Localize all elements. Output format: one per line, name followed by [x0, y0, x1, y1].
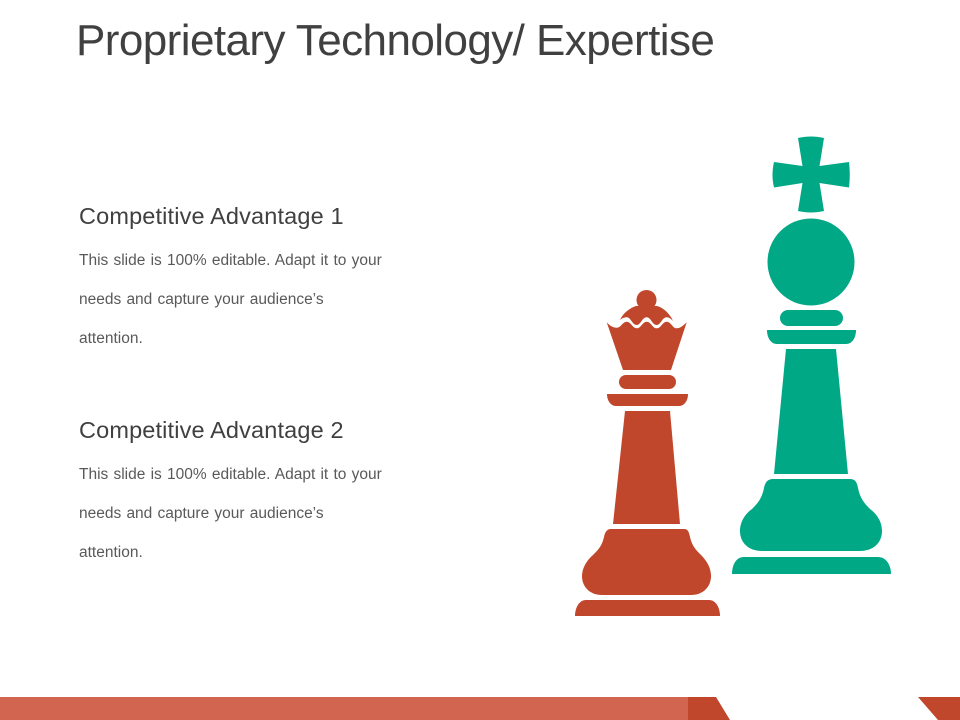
- footer accent: dark red corner: [918, 697, 960, 720]
- text block: advantage 2 description: [79, 466, 382, 561]
- footer bar: light red band: [0, 697, 688, 720]
- icon: green king chess piece: [732, 136, 891, 574]
- heading: competitive advantage 2: Competitive Advantage 2: [79, 417, 344, 443]
- text block: advantage 2 description: This slide is 100% editable. Adapt it to your: [79, 466, 382, 483]
- footer accent: dark red band end: [688, 697, 730, 720]
- heading: competitive advantage 1: Competitive Advantage 1: [79, 203, 344, 229]
- text block: advantage 1 description: needs and capture your audience’s: [79, 291, 324, 308]
- text block: advantage 1 description: attention.: [79, 330, 143, 347]
- text block: advantage 2 description: attention.: [79, 544, 143, 561]
- title: Proprietary Technology/ Expertise: [76, 16, 714, 65]
- text block: advantage 2 description: needs and capture your audience’s: [79, 505, 324, 522]
- text block: advantage 1 description: This slide is 100% editable. Adapt it to your: [79, 252, 382, 269]
- icon: red queen chess piece: [575, 290, 720, 616]
- text block: advantage 1 description: [79, 252, 382, 347]
